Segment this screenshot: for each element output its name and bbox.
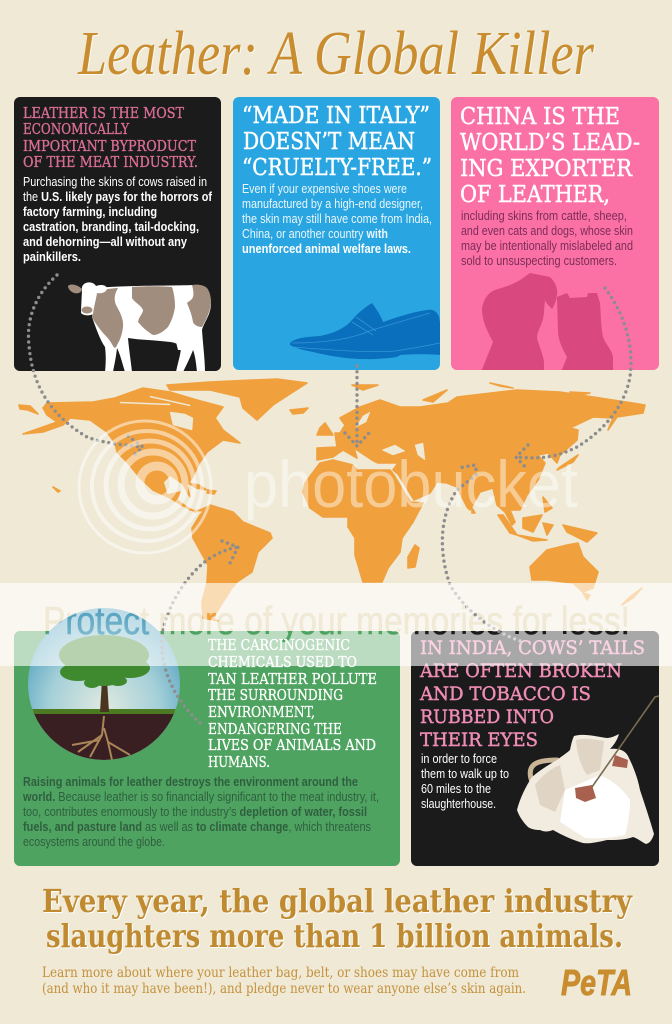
text: environment: fuels, and pasture land as well as to climate change, which threatens xyxy=(23,820,371,834)
text: cats and dogs: and even cats and dogs, whose skin xyxy=(461,224,633,238)
text: factory farming: and dehorning—all without any xyxy=(23,235,187,249)
text: cats and dogs xyxy=(461,209,633,268)
text: environment: ecosystems around the globe. xyxy=(23,835,165,849)
watermark band xyxy=(0,583,672,666)
arrow: us to cow panel xyxy=(28,275,143,456)
text: expensive shoes: the skin may still have come from India, xyxy=(242,212,432,226)
panel: pollution xyxy=(14,608,400,866)
heading: carcinogenic chemicals xyxy=(208,636,377,771)
panel: china xyxy=(451,97,659,372)
arrow: india to india panel xyxy=(442,465,520,641)
text: cats and dogs: sold to unsuspecting customers. xyxy=(461,254,617,268)
heading: carcinogenic chemicals: CHEMICALS USED TO xyxy=(208,653,357,671)
map: madagascar xyxy=(408,545,419,568)
panel: made in italy xyxy=(233,97,441,370)
panel: india xyxy=(411,631,659,866)
text: expensive shoes: China, or another country with xyxy=(242,227,388,241)
text: factory farming: painkillers. xyxy=(23,250,81,264)
text: expensive shoes xyxy=(242,182,432,256)
heading: byproduct: ECONOMICALLY xyxy=(23,120,130,138)
map: south america xyxy=(192,505,272,621)
heading: india: IN INDIA, COWS’ TAILS xyxy=(420,637,645,659)
map: north america xyxy=(23,388,240,512)
heading: india: AND TOBACCO IS xyxy=(419,683,591,705)
icon: shoe xyxy=(290,303,441,359)
heading: carcinogenic chemicals: ENVIRONMENT, xyxy=(208,703,315,721)
heading: carcinogenic chemicals: TAN LEATHER POLLUTE xyxy=(208,670,377,688)
heading: made in italy xyxy=(242,103,432,181)
heading: carcinogenic chemicals: HUMANS. xyxy=(208,753,270,771)
footer text: (and who it may have been!), and pledge never to wear anyone else’s skin again. xyxy=(42,981,526,997)
icon: cow xyxy=(68,282,211,372)
text: environment: too, contributes enormously to the industry’s depletion of water, fossil xyxy=(23,805,367,819)
text: environment xyxy=(22,775,379,849)
text: factory farming: Purchasing the skins of cows raised in xyxy=(23,175,207,189)
heading: india: RUBBED INTO xyxy=(420,706,554,728)
map: greenland and iceland xyxy=(167,379,308,420)
heading: china: OF LEATHER, xyxy=(460,182,610,208)
heading: made in italy: DOESN’T MEAN xyxy=(243,129,415,155)
heading: india: THEIR EYES xyxy=(420,729,538,751)
logo: peta: PeTA xyxy=(561,962,632,1003)
text: slaughterhouse walk: slaughterhouse. xyxy=(421,797,496,811)
panel: leather byproduct xyxy=(14,97,221,372)
text: slaughterhouse walk: in order to force xyxy=(421,752,497,766)
world map xyxy=(19,379,645,621)
text: factory farming xyxy=(23,175,213,264)
heading: made in italy: “MADE IN ITALY” xyxy=(242,103,430,129)
text: factory farming: the U.S. likely pays for the horrors of xyxy=(23,190,213,204)
footer text: Learn more about where your leather bag, belt, or shoes may have come from xyxy=(42,965,519,981)
text: cats and dogs: including skins from cattle, sheep, xyxy=(461,209,627,223)
footer headline xyxy=(42,882,634,956)
text: expensive shoes: manufactured by a high-end designer, xyxy=(242,197,423,211)
image: seated cow xyxy=(517,696,659,844)
footer text xyxy=(42,965,526,997)
map: asia pacific islands xyxy=(472,455,597,542)
heading: carcinogenic chemicals: THE SURROUNDING xyxy=(208,686,343,704)
text: environment: Raising animals for leather destroys the environment around the xyxy=(23,775,358,789)
arrow: italy to shoe panel xyxy=(345,366,369,446)
text: factory farming: factory farming, including xyxy=(23,205,157,219)
watermark rings xyxy=(79,421,211,553)
heading: byproduct xyxy=(23,104,198,171)
image: tree and roots xyxy=(28,608,180,762)
heading: india xyxy=(419,637,645,751)
text: expensive shoes: unenforced animal welfare laws. xyxy=(242,242,411,256)
arrow: china to pink panel xyxy=(516,288,631,470)
text: slaughterhouse walk xyxy=(421,752,509,811)
map: islands of europe and the arctic xyxy=(317,383,590,435)
heading: china: WORLD’S LEAD- xyxy=(460,130,640,156)
heading: china xyxy=(460,104,640,208)
text: environment: world. Because leather is so financially significant to the meat industry, it, xyxy=(22,790,379,804)
text: slaughterhouse walk: 60 miles to the xyxy=(421,782,491,796)
map: alaska islands and caribbean xyxy=(19,405,216,494)
icon: dog silhouettes xyxy=(481,273,613,372)
map: inland seas and bays xyxy=(120,396,425,460)
map: africa xyxy=(303,460,423,582)
heading: carcinogenic chemicals: ENDANGERING THE xyxy=(208,720,342,738)
arrow: brazil to pollution panel xyxy=(162,541,238,723)
heading: carcinogenic chemicals: THE CARCINOGENIC xyxy=(208,636,350,654)
map: eurasia xyxy=(317,390,645,525)
icon: cow head xyxy=(68,282,107,315)
heading: india: ARE OFTEN BROKEN xyxy=(419,660,622,682)
heading: made in italy: “CRUELTY-FREE.” xyxy=(242,155,432,181)
heading: china: CHINA IS THE xyxy=(460,104,620,130)
watermark text: photobucket xyxy=(244,447,578,521)
heading: carcinogenic chemicals: LIVES OF ANIMALS AND xyxy=(208,736,376,754)
text: expensive shoes: Even if your expensive shoes were xyxy=(242,182,407,196)
heading: byproduct: OF THE MEAT INDUSTRY. xyxy=(23,153,198,171)
map: australia and new zealand xyxy=(530,543,642,605)
heading: china: ING EXPORTER xyxy=(460,156,633,182)
text: cats and dogs: may be intentionally mislabeled and xyxy=(461,239,633,253)
text: slaughterhouse walk: them to walk up to xyxy=(421,767,509,781)
text: factory farming: castration, branding, tail-docking, xyxy=(23,220,199,234)
heading: byproduct: IMPORTANT BYPRODUCT xyxy=(23,137,196,155)
heading: byproduct: LEATHER IS THE MOST xyxy=(23,104,184,122)
